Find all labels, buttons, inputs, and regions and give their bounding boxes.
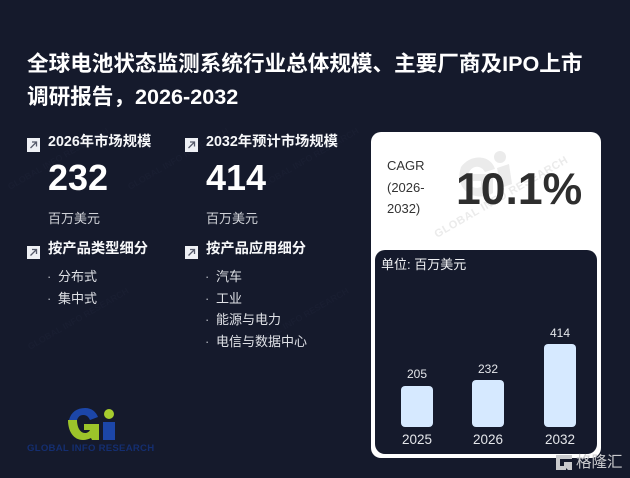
unit label: 单位: 百万美元: [381, 257, 466, 272]
bar: [544, 344, 576, 427]
CAGR value: 10.1%: [456, 165, 582, 214]
bar: 2026: [472, 362, 504, 447]
text: GLOBAL INFO RESEARCH: [256, 126, 360, 192]
panel: by product type: ·: [47, 269, 51, 284]
list item: 电信与数据中心: [216, 334, 307, 349]
text: GLOBAL INFO RESEARCH: [26, 286, 130, 352]
brand text: 格隆汇: [576, 454, 623, 471]
icon: arrow: [27, 138, 40, 152]
heading: 按产品类型细分: [48, 241, 148, 257]
panel: CAGR and bar chart card: [371, 132, 601, 458]
unit: 百万美元: [48, 211, 100, 226]
panel: bar chart: [375, 250, 597, 454]
panel: by product application: ·: [205, 312, 209, 327]
CAGR label: 2032): [387, 201, 420, 216]
panel: by product application: ·: [205, 291, 209, 306]
bar: [401, 386, 433, 427]
value label: 232: [478, 362, 498, 376]
CAGR label: CAGR: [387, 158, 425, 173]
text: GLOBAL INFO RESEARCH: [246, 286, 350, 352]
icon: Gi mark: [68, 408, 115, 440]
heading: 2032年预计市场规模: [206, 134, 338, 150]
logo: Global Info Research: [27, 408, 154, 454]
icon: arrow: [27, 246, 40, 259]
heading: 2026年市场规模: [48, 134, 151, 150]
CAGR label: [387, 158, 425, 216]
text: GLOBAL INFO RESEARCH: [126, 126, 230, 192]
value: 414: [206, 157, 266, 198]
panel: 2026 market size: [27, 134, 151, 226]
year label: 2026: [473, 432, 503, 447]
text: GLOBAL INFO RESEARCH: [6, 126, 110, 192]
bar: 2032: [544, 326, 576, 447]
panel: by product application: ·: [205, 334, 209, 349]
icon: Gelonghui mark: [556, 455, 572, 470]
list item: 集中式: [58, 291, 97, 306]
logo text: GLOBAL INFO RESEARCH: [27, 443, 154, 454]
year label: 2032: [545, 432, 575, 447]
year label: 2025: [402, 432, 432, 447]
icon: arrow: [185, 246, 198, 259]
value label: 414: [550, 326, 570, 340]
list item: 能源与电力: [216, 312, 281, 327]
bar: [472, 380, 504, 427]
panel: by product type: [27, 240, 148, 306]
CAGR label: (2026-: [387, 180, 425, 195]
title: 全球电池状态监测系统行业总体规模、主要厂商及IPO上市: [27, 51, 582, 76]
unit: 百万美元: [206, 211, 258, 226]
list item: 分布式: [58, 269, 97, 284]
panel: by product application: [185, 240, 307, 349]
title: [27, 51, 582, 109]
watermark: Gelonghui: [556, 454, 623, 471]
value: 232: [48, 157, 108, 198]
list item: 工业: [216, 291, 242, 306]
heading: 按产品应用细分: [206, 241, 306, 257]
panel: 2032 forecast market size: [185, 134, 338, 226]
panel: by product type: ·: [47, 291, 51, 306]
title: 调研报告，2026-2032: [27, 84, 238, 109]
bar: 2025: [401, 367, 433, 447]
list item: 汽车: [216, 269, 242, 284]
icon: arrow: [185, 138, 198, 152]
value label: 205: [407, 367, 427, 381]
panel: by product application: ·: [205, 269, 209, 284]
watermark: GLOBAL INFO RESEARCH: [432, 154, 570, 241]
